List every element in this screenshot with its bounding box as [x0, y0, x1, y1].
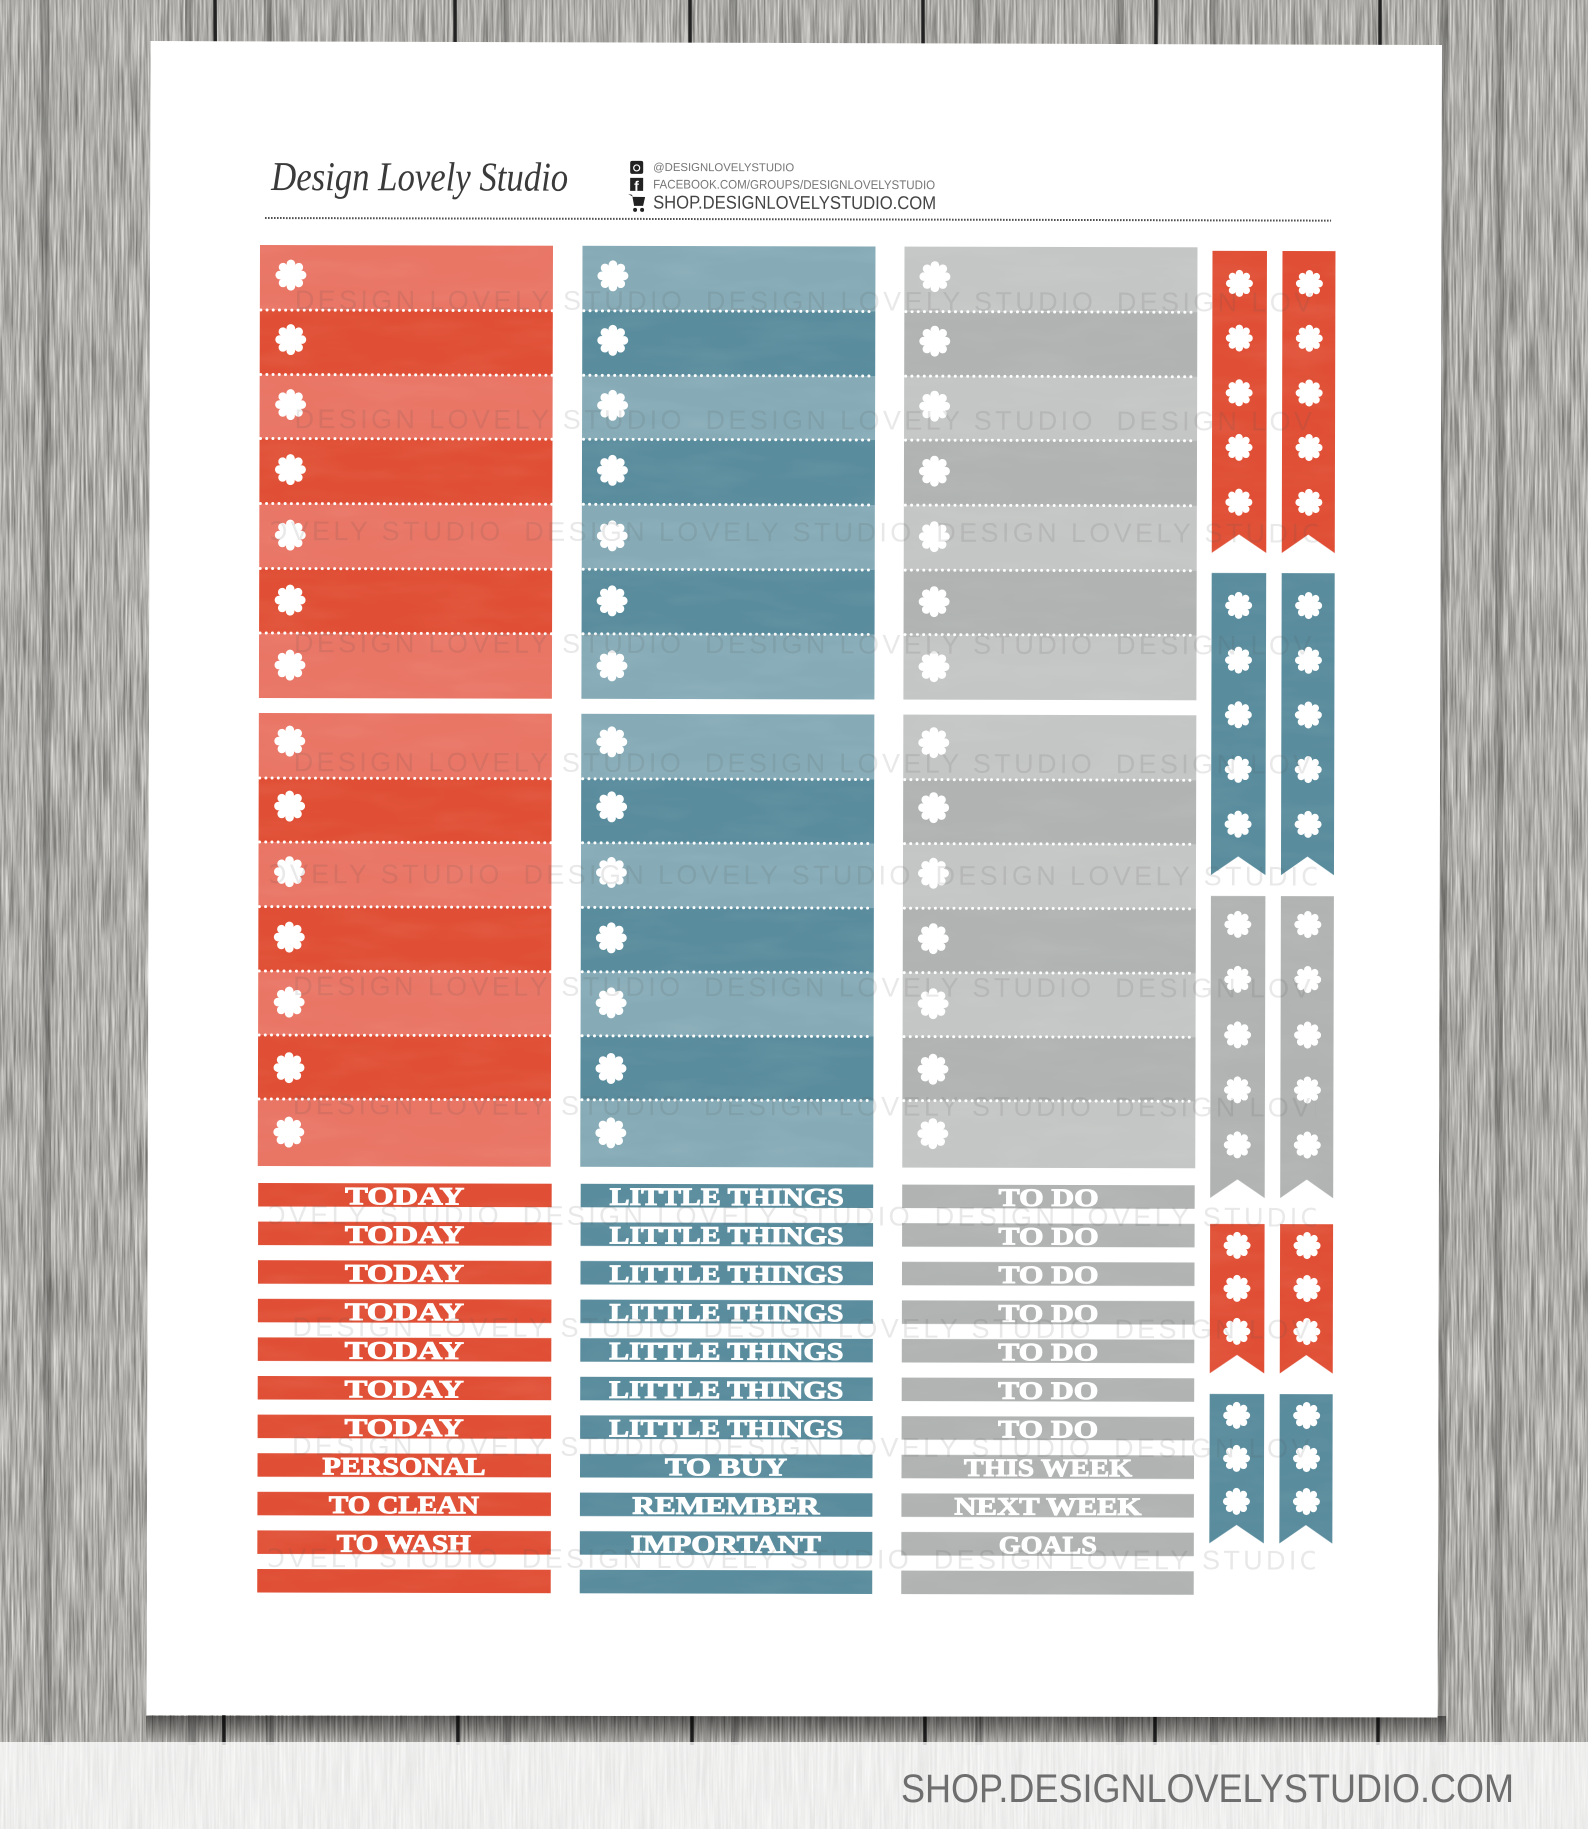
watermark text rows: DESIGN LOVELY STUDIO [113, 516, 500, 547]
shop url: SHOP.DESIGNLOVELYSTUDIO.COM [653, 191, 936, 213]
watermark text rows: DESIGN LOVELY STUDIO [523, 860, 910, 891]
red block 1 [259, 245, 553, 699]
strip backgrounds [580, 1184, 873, 1594]
strip labels: TODAY [345, 1376, 464, 1404]
watermark text rows: DESIGN LOVELY STUDIO [705, 629, 1092, 660]
footer band [0, 1742, 1588, 1829]
strip backgrounds [257, 1183, 552, 1593]
strip labels [954, 1185, 1143, 1560]
logo script: Design Lovely Studio [270, 153, 568, 200]
watermark text rows: DESIGN LOVELY STUDIO [523, 1201, 910, 1232]
watermark text rows: DESIGN LOVELY STUDIO [935, 861, 1322, 892]
strip labels: TODAY [345, 1260, 464, 1288]
watermark text rows: DESIGN LOVELY STUDIO [706, 405, 1093, 436]
watermark text rows: DESIGN LOVELY STUDIO [706, 286, 1093, 317]
strip labels: TODAY [345, 1415, 464, 1442]
strip labels: TO CLEAN [329, 1492, 479, 1519]
strip labels: LITTLE THINGS [609, 1415, 843, 1443]
blue block 2 [580, 714, 874, 1168]
watermark text rows: DESIGN LOVELY STUDIO [703, 1432, 1090, 1463]
strip labels: LITTLE THINGS [609, 1338, 843, 1366]
strip labels: TODAY [345, 1299, 464, 1326]
strip labels: TO DO [998, 1339, 1098, 1366]
watermark text rows: DESIGN LOVELY STUDIO [705, 748, 1092, 779]
panel: bookmark flags [1209, 251, 1335, 1544]
watermark text rows: DESIGN LOVELY STUDIO [295, 404, 682, 435]
strip labels: LITTLE THINGS [609, 1300, 843, 1327]
strip labels [322, 1183, 486, 1558]
watermark text rows: DESIGN LOVELY STUDIO [522, 1544, 909, 1575]
facebook text: FACEBOOK.COM/GROUPS/DESIGNLOVELYSTUDIO [653, 177, 935, 192]
watermark text rows: DESIGN LOVELY STUDIO [292, 1431, 679, 1462]
strip labels: NEXT WEEK [954, 1494, 1142, 1521]
watermark text rows: DESIGN LOVELY STUDIO [294, 628, 681, 659]
header [270, 153, 936, 213]
paper sheet [146, 41, 1442, 1718]
icons: flowers on blocks [273, 260, 950, 1149]
watermark text rows [268, 290, 1318, 1570]
blue block 1 [581, 246, 875, 700]
strip labels: TO DO [998, 1301, 1098, 1328]
icon: facebook [630, 178, 643, 194]
watermark text rows: DESIGN LOVELY STUDIO [294, 747, 681, 778]
strip labels: TO DO [999, 1185, 1099, 1212]
strip labels: TODAY [345, 1183, 464, 1211]
blue tall flags [1211, 573, 1335, 875]
watermark text rows: DESIGN LOVELY STUDIO [292, 1312, 679, 1343]
watermark text rows: DESIGN LOVELY STUDIO [1114, 1314, 1501, 1345]
watermark text rows: DESIGN LOVELY STUDIO [704, 1091, 1091, 1122]
watermark text rows: DESIGN LOVELY STUDIO [111, 1543, 498, 1574]
watermark text rows: DESIGN LOVELY STUDIO [112, 1200, 499, 1231]
strip labels: PERSONAL [322, 1453, 486, 1481]
watermark text rows: DESIGN LOVELY STUDIO [1117, 406, 1504, 437]
panel: red label strips [257, 1183, 552, 1593]
watermark text rows: DESIGN LOVELY STUDIO [1116, 630, 1503, 661]
strip labels: IMPORTANT [631, 1531, 821, 1559]
watermark text rows: DESIGN LOVELY STUDIO [936, 518, 1323, 549]
strip backgrounds [901, 1185, 1195, 1595]
watermark text rows: DESIGN LOVELY STUDIO [293, 1090, 680, 1121]
red tall flags [1212, 251, 1335, 553]
strip labels: TO DO [998, 1378, 1098, 1405]
watermark text rows: DESIGN LOVELY STUDIO [524, 517, 911, 548]
footer url: SHOP.DESIGNLOVELYSTUDIO.COM [901, 1767, 1514, 1811]
strip labels: TO DO [998, 1416, 1098, 1444]
watermark text rows: DESIGN LOVELY STUDIO [295, 285, 682, 316]
strip labels: TO DO [999, 1223, 1099, 1251]
strip labels: TODAY [345, 1338, 464, 1365]
strip labels: LITTLE THINGS [610, 1184, 844, 1211]
watermark text rows: DESIGN LOVELY STUDIO [935, 1202, 1322, 1233]
watermark text rows: DESIGN LOVELY STUDIO [1115, 973, 1502, 1004]
watermark text rows: DESIGN LOVELY STUDIO [704, 972, 1091, 1003]
panel: blue blocks [580, 246, 875, 1168]
panel: gray label strips [901, 1185, 1195, 1595]
strip labels: TO BUY [665, 1454, 787, 1481]
strip labels [609, 1184, 844, 1559]
panel: gray blocks [902, 247, 1197, 1168]
gray tall flags [1210, 896, 1334, 1198]
red block 2 [258, 713, 552, 1167]
gray block 2 [902, 715, 1196, 1168]
watermark text rows: DESIGN LOVELY STUDIO [1115, 1092, 1502, 1123]
watermark text rows: DESIGN LOVELY STUDIO [934, 1545, 1321, 1576]
watermark text rows: DESIGN LOVELY STUDIO [1117, 287, 1504, 318]
dotted separators [259, 310, 1197, 1101]
strip labels: TO WASH [337, 1531, 471, 1558]
watermark text rows: DESIGN LOVELY STUDIO [703, 1313, 1090, 1344]
strip labels: TO DO [998, 1262, 1099, 1289]
watermark text rows: DESIGN LOVELY STUDIO [1114, 1433, 1501, 1464]
icon: instagram [630, 161, 643, 174]
red short flags [1210, 1224, 1333, 1374]
gray block 1 [903, 247, 1197, 700]
blue short flags [1209, 1394, 1333, 1544]
panel: blue label strips [580, 1184, 873, 1594]
watermark text rows: DESIGN LOVELY STUDIO [293, 971, 680, 1002]
strip labels: THIS WEEK [964, 1455, 1133, 1482]
strip labels: GOALS [999, 1532, 1097, 1559]
handle text: @DESIGNLOVELYSTUDIO [653, 162, 794, 174]
strip labels: TODAY [345, 1222, 464, 1249]
strip labels: REMEMBER [632, 1493, 821, 1520]
strip labels: LITTLE THINGS [610, 1222, 844, 1250]
watermark text rows: DESIGN LOVELY STUDIO [112, 859, 499, 890]
strip labels: LITTLE THINGS [609, 1261, 844, 1289]
watermark text rows: DESIGN LOVELY STUDIO [1116, 749, 1503, 780]
strip labels: LITTLE THINGS [609, 1377, 843, 1404]
icon: facebook: f [634, 178, 639, 194]
panel: red blocks [258, 245, 553, 1167]
icon: cart [628, 194, 645, 212]
sheet contents [257, 160, 1336, 1595]
